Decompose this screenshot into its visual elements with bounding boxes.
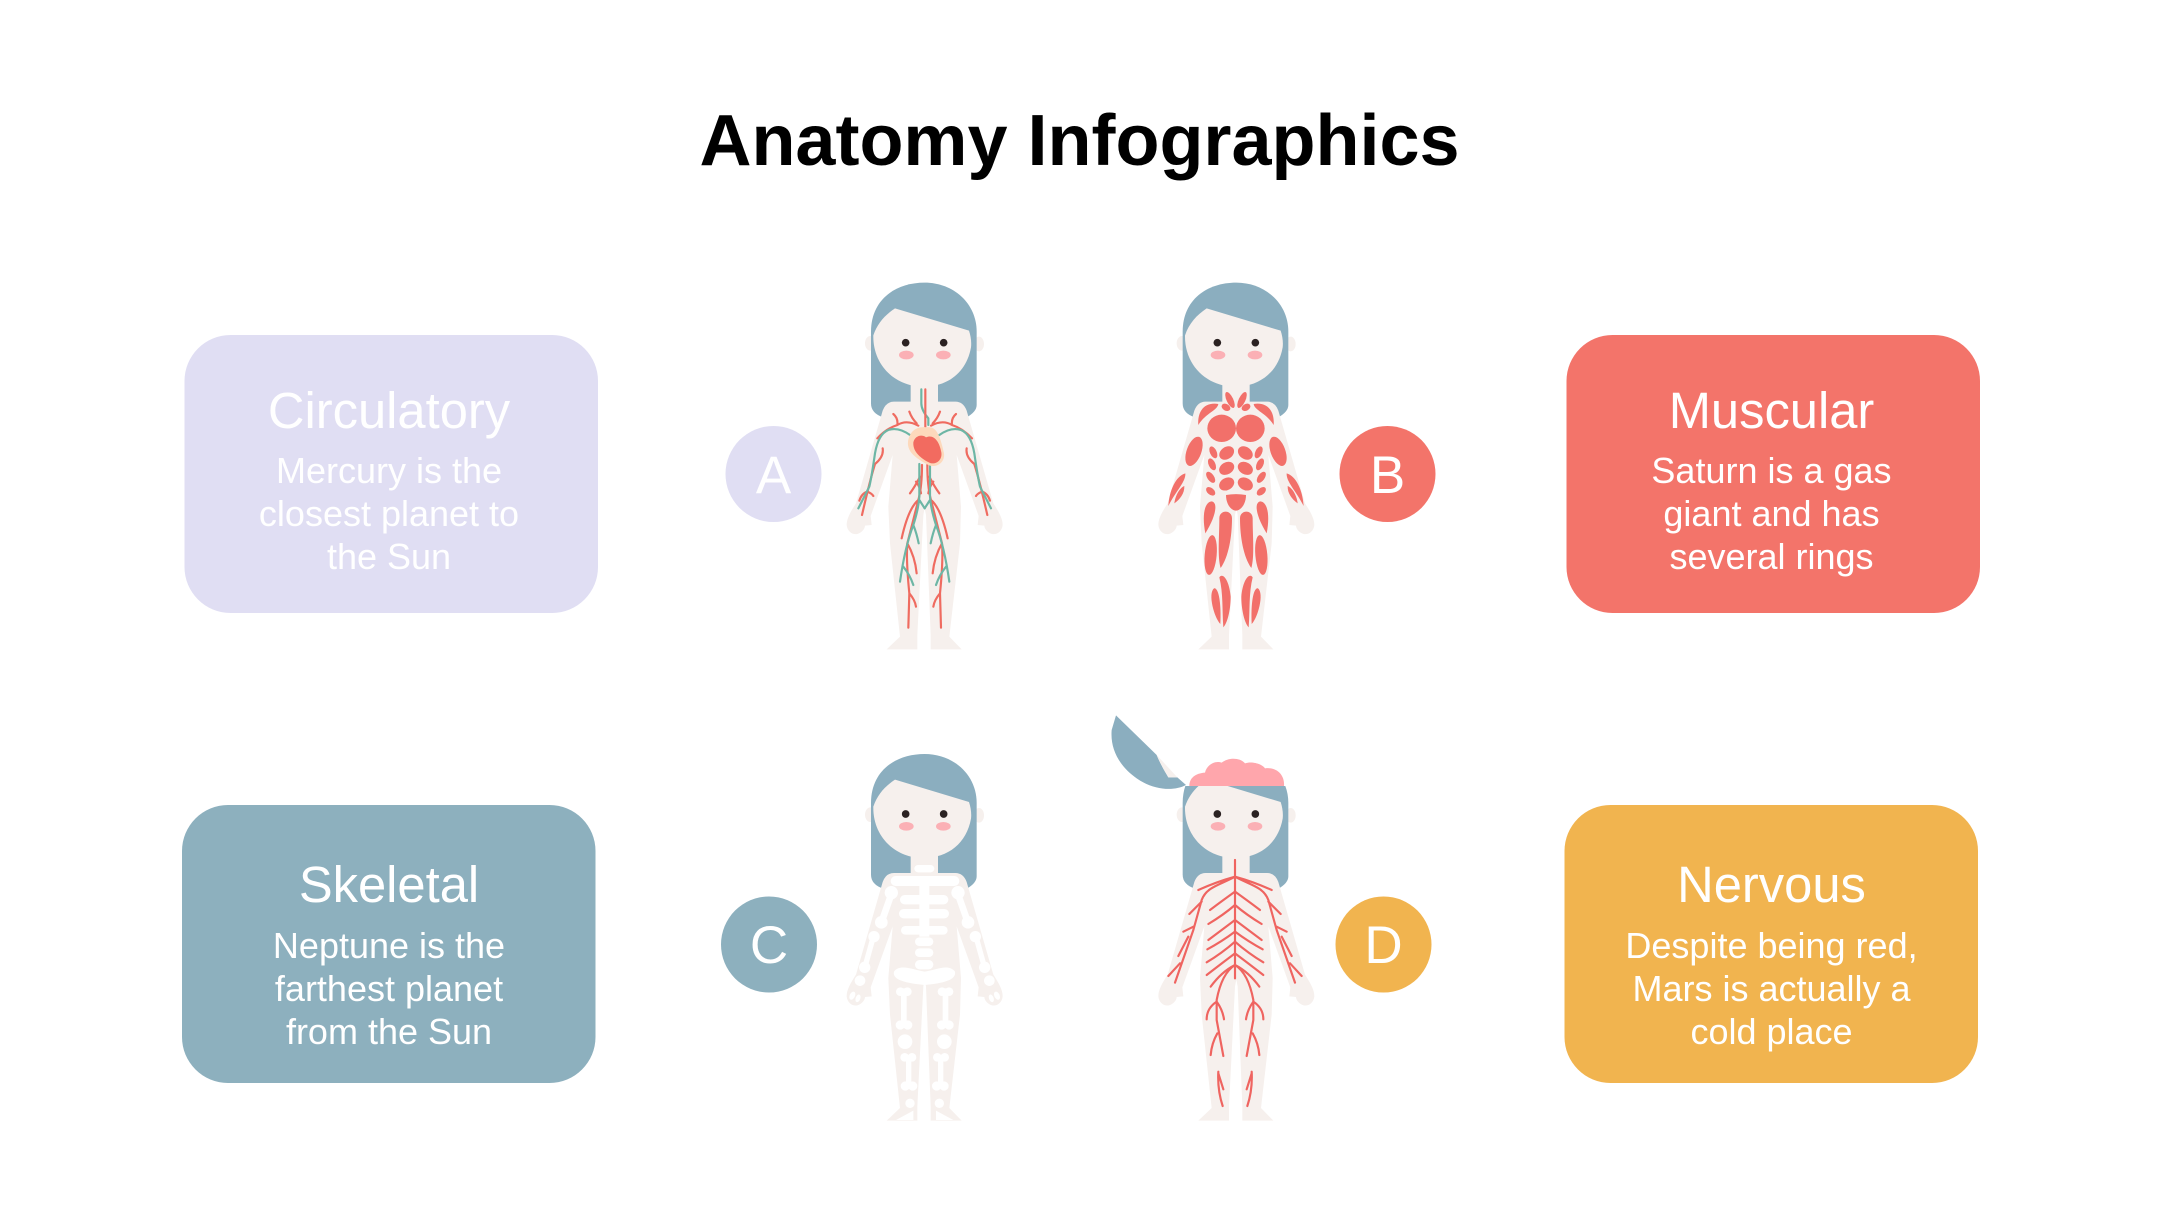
text block: circulatory description (259, 450, 519, 577)
text block: skeletal description: farthest planet (275, 968, 503, 1009)
text block: circulatory description: the Sun (327, 536, 451, 577)
figure: muscular system (1158, 283, 1314, 649)
badge C: C (750, 916, 788, 975)
heading: skeletal: Skeletal (299, 856, 479, 913)
text block: nervous description: Mars is actually a (1632, 968, 1912, 1009)
heading: nervous: Nervous (1677, 856, 1866, 913)
badge B (1340, 426, 1436, 522)
icon: open scalp hair flap (1111, 715, 1186, 789)
text block: nervous description: cold place (1690, 1011, 1853, 1052)
text block: skeletal description: Neptune is the (273, 925, 505, 966)
text block: circulatory description: closest planet to (259, 493, 519, 534)
panel: skeletal (182, 805, 596, 1083)
figure: skeletal system (847, 754, 1003, 1121)
text block: nervous description (1625, 925, 1918, 1052)
badge C (721, 896, 817, 992)
icon: brain (1189, 759, 1284, 786)
text block: muscular description: several rings (1669, 536, 1874, 577)
text block: skeletal description (273, 925, 505, 1052)
text block: skeletal description: from the Sun (286, 1011, 492, 1052)
badge D (1336, 896, 1432, 992)
figure: nervous system (1111, 715, 1314, 1121)
badge A (726, 426, 822, 522)
figure: circulatory system (847, 283, 1003, 649)
text block: circulatory description: Mercury is the (276, 450, 502, 491)
title: Anatomy Infographics (699, 101, 1460, 181)
panel: nervous (1564, 805, 1978, 1083)
badge A: A (756, 446, 792, 505)
text block: muscular description (1651, 450, 1892, 577)
text block: nervous description: Despite being red, (1625, 925, 1918, 966)
text block: muscular description: Saturn is a gas (1651, 450, 1892, 491)
badge B: B (1370, 446, 1405, 505)
heading: circulatory: Circulatory (268, 382, 511, 439)
badge D: D (1364, 916, 1403, 975)
panel: muscular (1566, 335, 1980, 613)
heading: muscular: Muscular (1669, 382, 1874, 439)
text block: muscular description: giant and has (1663, 493, 1880, 534)
icon: heart (908, 427, 944, 466)
panel: circulatory (184, 335, 598, 613)
